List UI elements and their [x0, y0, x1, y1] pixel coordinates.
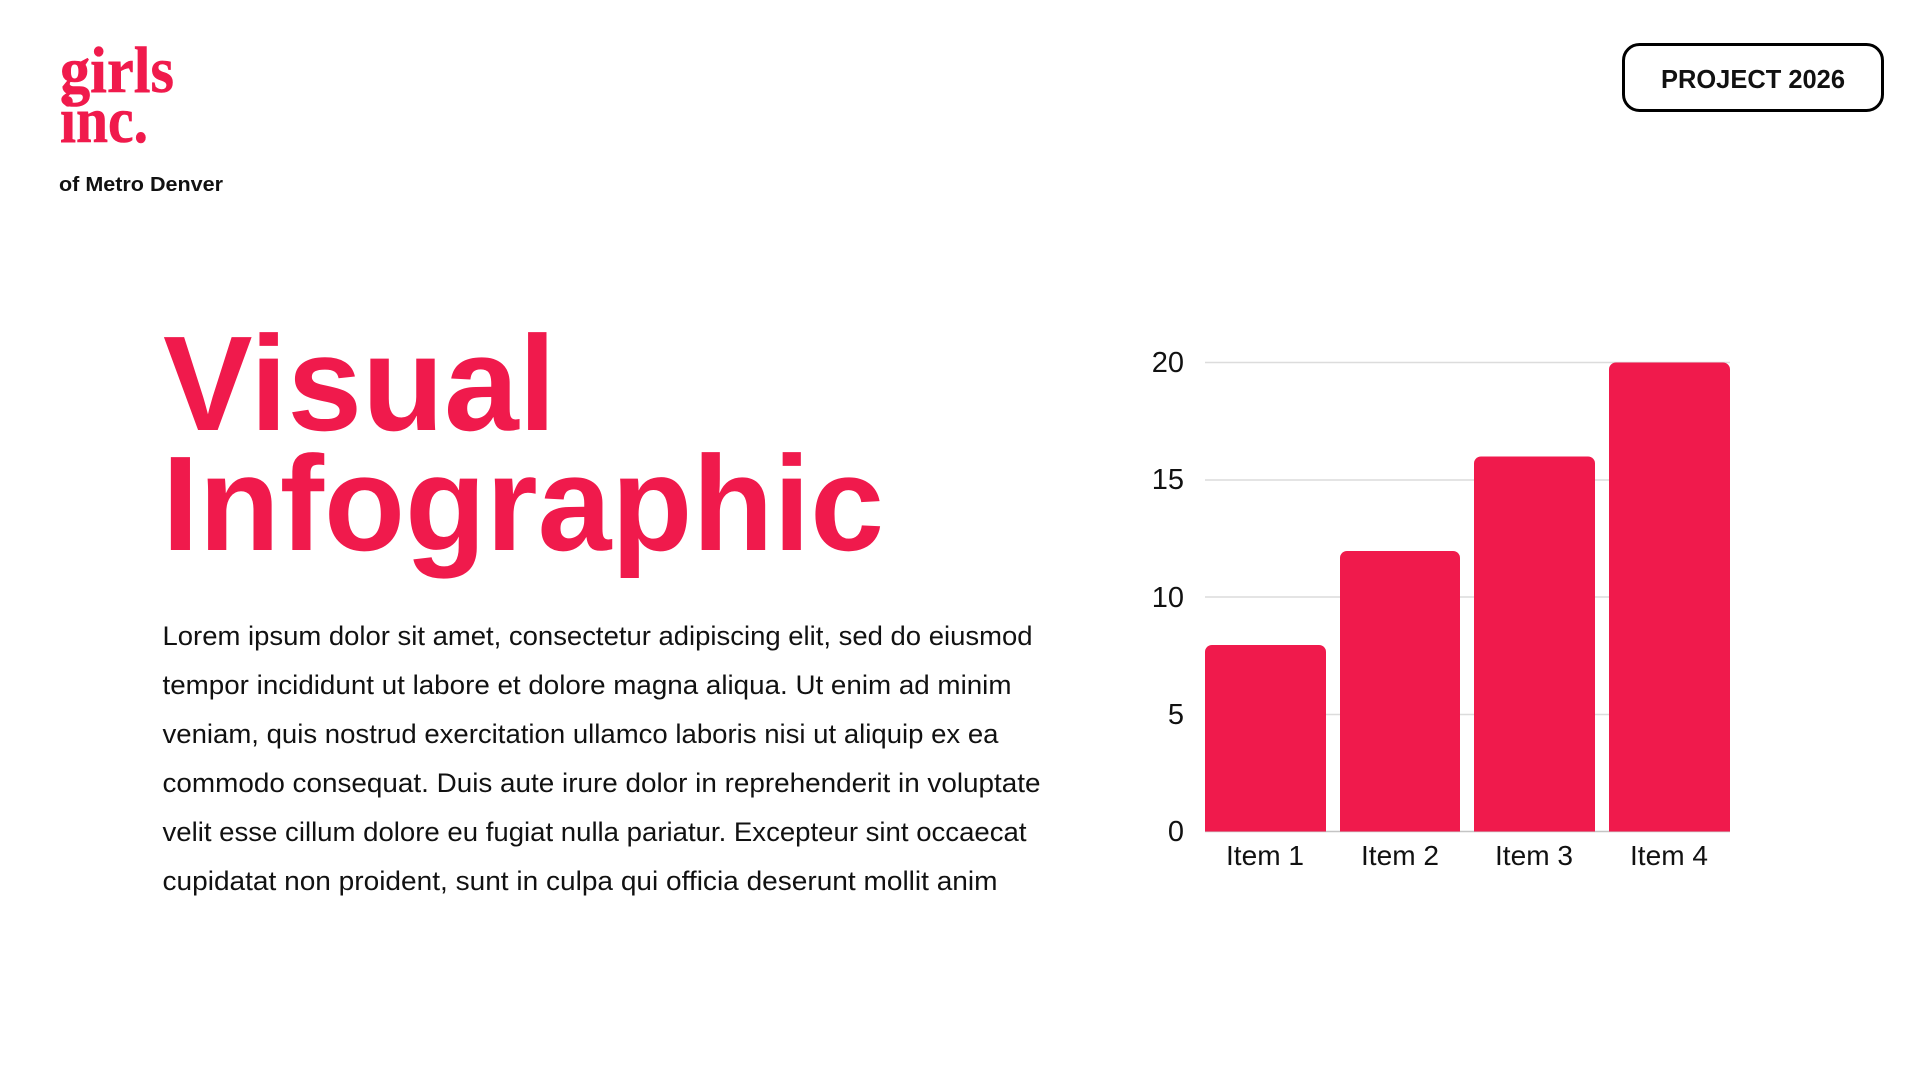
y axis labels: 0: [1168, 816, 1184, 848]
body text: [162, 621, 1040, 896]
body text: tempor incididunt ut labore et dolore magna aliqua. Ut enim ad minim: [162, 670, 1011, 700]
body text: cupidatat non proident, sunt in culpa qui officia deserunt mollit anim: [162, 866, 997, 896]
y axis labels: [1152, 347, 1184, 848]
title: [162, 308, 884, 579]
logo: girls inc. of Metro Denver: of Metro Denver: [59, 174, 223, 196]
logo: girls inc. of Metro Denver: girls: [60, 34, 174, 107]
body text: velit esse cillum dolore eu fugiat nulla pariatur. Excepteur sint occaecat: [162, 817, 1027, 847]
title: Visual: [163, 308, 556, 459]
body text: Lorem ipsum dolor sit amet, consectetur adipiscing elit, sed do eiusmod: [162, 621, 1032, 651]
body text: commodo consequat. Duis aute irure dolor in reprehenderit in voluptate: [162, 768, 1040, 798]
y axis labels: 10: [1152, 582, 1184, 614]
logo: girls inc. of Metro Denver: [59, 34, 223, 196]
x axis labels: Item 1: [1226, 840, 1304, 871]
x axis labels: Item 3: [1495, 840, 1573, 871]
bar chart: [1152, 347, 1730, 871]
bars: [1205, 362, 1730, 832]
project tag: PROJECT 2026: [1661, 64, 1845, 94]
y axis labels: 15: [1152, 464, 1184, 496]
body text: veniam, quis nostrud exercitation ullamco laboris nisi ut aliquip ex ea: [162, 719, 999, 749]
logo: girls inc. of Metro Denver: inc.: [60, 84, 148, 157]
y axis labels: 20: [1152, 347, 1184, 379]
y axis labels: 5: [1168, 699, 1184, 731]
x axis labels: Item 2: [1361, 840, 1439, 871]
title: Infographic: [162, 428, 884, 579]
x axis labels: [1226, 840, 1708, 871]
project tag: [1624, 44, 1882, 110]
x axis labels: Item 4: [1630, 840, 1708, 871]
